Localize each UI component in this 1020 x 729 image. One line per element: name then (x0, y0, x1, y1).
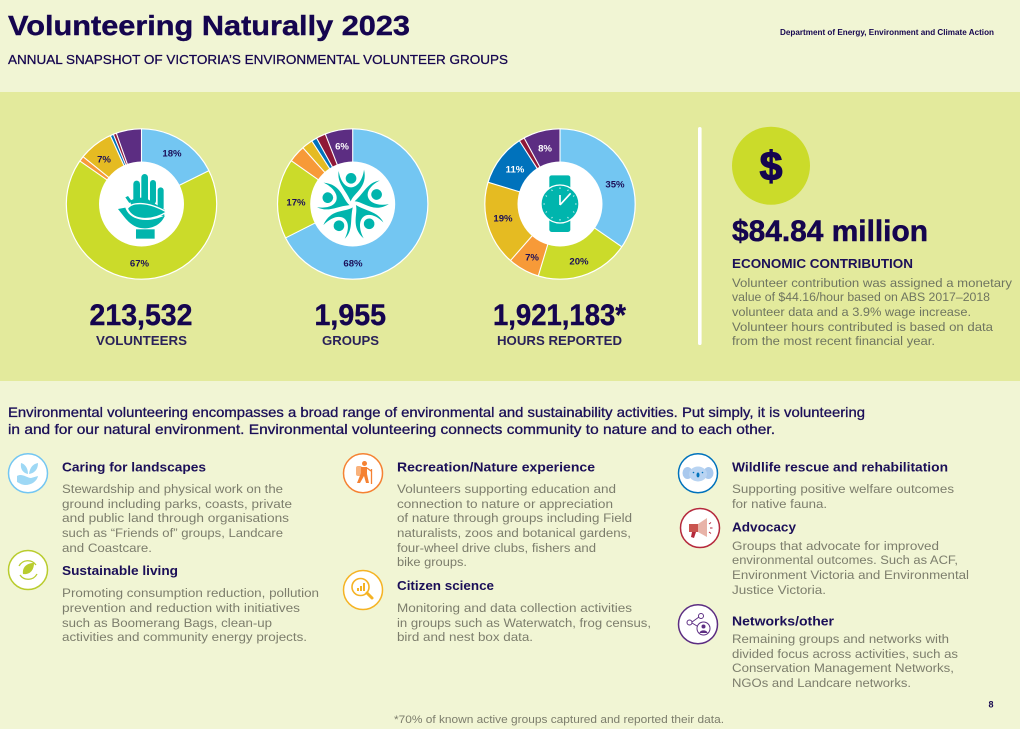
label: 19%: 19% (493, 214, 513, 224)
description (397, 482, 632, 569)
label: 35%: 35% (605, 180, 625, 190)
description: NGOs and Landcare networks. (732, 676, 911, 690)
donut chart: volunteers (59, 122, 224, 286)
label: 7%: 7% (97, 154, 111, 166)
heading: Networks/other (732, 614, 834, 628)
description: Stewardship and physical work on the (62, 482, 283, 496)
economic description: from the most recent financial year. (732, 334, 935, 348)
description: and public land through organisations (62, 511, 289, 525)
description: four-wheel drive clubs, fishers and (397, 541, 596, 555)
department name: Department of Energy, Environment and Climate Action (780, 28, 994, 37)
item: wildlife rescue (678, 454, 954, 511)
heading: Citizen science (397, 578, 494, 593)
donut chart: groups (270, 121, 435, 287)
item: recreation (344, 454, 632, 569)
donut chart: hours reported (477, 121, 643, 287)
icon: koala (678, 454, 718, 493)
stat: volunteers (90, 299, 192, 348)
economic value: $84.84 million (732, 215, 928, 248)
description: divided focus across activities, such as (732, 647, 958, 661)
economic description: Volunteer hours contributed is based on data (732, 320, 993, 334)
icon: leaf with cycle arrows (8, 550, 48, 590)
intro text (8, 405, 865, 437)
description: Promoting consumption reduction, pollution (62, 586, 319, 600)
stat: volunteers: 213,532 (90, 299, 192, 332)
icon: dollar coin (732, 127, 810, 205)
economic description: volunteer data and a 3.9% wage increase. (732, 305, 971, 319)
description: bike groups. (397, 555, 467, 569)
description: Groups that advocate for improved (732, 539, 939, 553)
description (732, 482, 954, 511)
description (732, 539, 969, 597)
description: bird and nest box data. (397, 630, 533, 644)
icon: magnifier with bars (344, 570, 382, 610)
icon: wristwatch (541, 175, 579, 232)
description: of nature through groups including Field (397, 511, 632, 525)
icon: five people in a circle (316, 170, 389, 240)
label: 18%: 18% (162, 148, 182, 160)
description: such as Boomerang Bags, clean-up (62, 616, 272, 630)
description (397, 601, 651, 644)
description: such as “Friends of” groups, Landcare (62, 526, 283, 540)
description: in groups such as Waterwatch, frog census, (397, 616, 651, 630)
description: Conservation Management Networks, (732, 661, 954, 675)
heading: Wildlife rescue and rehabilitation (732, 460, 948, 474)
icon: dollar coin: $ (760, 143, 783, 189)
title: Volunteering Naturally 2023 (8, 10, 410, 41)
description: and Coastcare. (62, 541, 152, 555)
item: citizen science (344, 570, 651, 644)
description: Environment Victoria and Environmental (732, 568, 969, 582)
stat: groups: GROUPS (322, 334, 379, 348)
item: advocacy (680, 508, 969, 597)
description: naturalists, zoos and botanical gardens, (397, 526, 631, 540)
icon: hiker (344, 454, 382, 493)
description: for native fauna. (732, 497, 827, 511)
label: 67%: 67% (130, 258, 150, 270)
icon: megaphone (680, 508, 720, 548)
stat: hours reported: HOURS REPORTED (497, 334, 622, 348)
stat: hours reported: 1,921,183* (493, 299, 626, 332)
subtitle: ANNUAL SNAPSHOT OF VICTORIA’S ENVIRONMENTAL VOLUNTEER GROUPS (8, 52, 508, 67)
icon: hand with leaf (118, 174, 167, 239)
stat: hours reported (493, 299, 626, 348)
description: prevention and reduction with initiatives (62, 601, 300, 615)
description: Justice Victoria. (732, 583, 826, 597)
intro text: Environmental volunteering encompasses a broad range of environmental and sustainability activities. Put simply, it is volunteering (8, 405, 865, 420)
description: Monitoring and data collection activities (397, 601, 632, 615)
label: 17%: 17% (286, 198, 306, 208)
economic description: value of $44.16/hour based on ABS 2017–2018 (732, 290, 990, 304)
stat: groups: 1,955 (314, 299, 386, 332)
panel: statistics band (0, 92, 1020, 381)
economic description (732, 276, 1013, 348)
icon: network nodes and person (678, 605, 718, 644)
heading: Caring for landscapes (62, 460, 206, 474)
description: Remaining groups and networks with (732, 632, 949, 646)
description: connection to nature or appreciation (397, 497, 613, 511)
description (62, 482, 292, 555)
footnote: *70% of known active groups captured and reported their data. (394, 714, 724, 726)
label: 8%: 8% (538, 144, 552, 154)
label: 7%: 7% (525, 252, 539, 264)
stat: groups (314, 299, 386, 348)
item: networks (678, 605, 958, 690)
intro text: in and for our natural environment. Environmental volunteering connects community to nature and to each other. (8, 422, 775, 437)
description: environmental outcomes. Such as ACF, (732, 553, 958, 567)
description (62, 586, 319, 644)
description (732, 632, 958, 690)
divider (698, 127, 702, 345)
heading: Advocacy (732, 520, 797, 534)
economic description: Volunteer contribution was assigned a monetary (732, 276, 1013, 290)
label: 6%: 6% (335, 142, 349, 152)
item: caring for landscapes (8, 454, 292, 555)
heading: Recreation/Nature experience (397, 460, 595, 474)
item: sustainable living (8, 550, 319, 644)
description: Volunteers supporting education and (397, 482, 616, 496)
description: ground including parks, coasts, private (62, 497, 292, 511)
description: Supporting positive welfare outcomes (732, 482, 954, 496)
label: 11%: 11% (506, 164, 525, 176)
label: 68%: 68% (343, 258, 363, 270)
icon: hand and sprout (8, 454, 48, 493)
description: activities and community energy projects. (62, 630, 307, 644)
heading: Sustainable living (62, 563, 178, 578)
economic heading: ECONOMIC CONTRIBUTION (732, 257, 913, 271)
stat: volunteers: VOLUNTEERS (96, 334, 187, 348)
panel: economic contribution (732, 127, 1013, 348)
label: 20%: 20% (569, 256, 589, 268)
page number: 8 (988, 700, 994, 710)
